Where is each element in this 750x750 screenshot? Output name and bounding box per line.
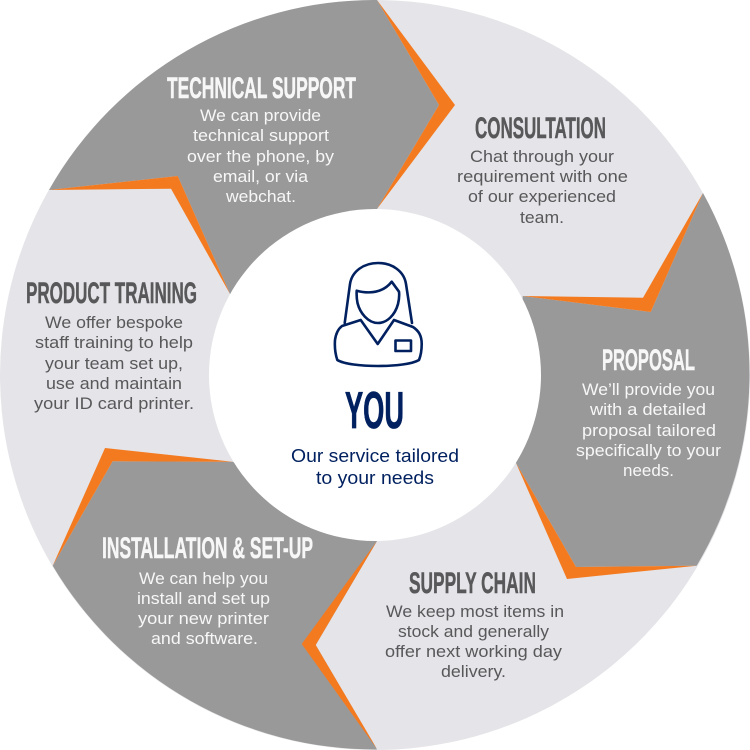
text block: installation description — [137, 569, 270, 648]
text block: installation description: and software. — [151, 629, 258, 648]
text block: consultation description: Chat through your — [470, 147, 614, 166]
panel: centre circle — [209, 209, 541, 541]
arrow: orange accent technical support to consultation — [377, 0, 455, 209]
text block: installation description: your new printer — [138, 609, 269, 628]
text block: supply chain description: We keep most items in — [386, 602, 564, 621]
text block: installation description: We can help you — [139, 569, 268, 588]
text block: technical support description: over the phone, by — [187, 147, 335, 166]
arrow: orange accent supply chain to installation — [302, 541, 377, 749]
heading: installation and set-up: INSTALLATION & SET-UP — [102, 532, 313, 565]
text block: technical support description: email, or via — [213, 167, 309, 186]
arrow: orange accent consultation to proposal — [523, 193, 703, 312]
heading: technical support: TECHNICAL SUPPORT — [167, 72, 356, 105]
text block: consultation description: of our experienced — [468, 187, 616, 206]
text block: technical support description — [187, 106, 335, 206]
arrow: orange accent installation to product training — [53, 448, 233, 566]
text block: supply chain description: offer next working day — [385, 642, 563, 661]
panel: installation segment — [53, 461, 377, 750]
text block: product training description: your ID card printer. — [34, 394, 194, 413]
text block: product training description: your team set up, — [45, 354, 183, 373]
text block: you description: Our service tailored — [291, 445, 459, 466]
text block: technical support description: We can provide — [200, 106, 321, 125]
heading: supply chain: SUPPLY CHAIN — [409, 567, 536, 600]
text block: product training description: staff training to help — [35, 333, 193, 352]
text block: installation description: install and set up — [137, 589, 270, 608]
text block: supply chain description: stock and generally — [398, 622, 550, 641]
text block: proposal description: with a detailed — [589, 400, 706, 419]
text block: technical support description: webchat. — [225, 187, 296, 206]
text block: product training description — [34, 313, 194, 413]
text block: product training description: We offer bespoke — [45, 313, 183, 332]
heading: you: YOU — [345, 382, 404, 440]
text block: consultation description — [457, 147, 628, 227]
text block: consultation description: requirement with one — [457, 167, 628, 186]
heading: consultation: CONSULTATION — [475, 112, 606, 145]
text block: product training description: use and maintain — [46, 374, 182, 393]
panel: technical support segment — [49, 0, 439, 294]
text block: proposal description: proposal tailored — [582, 421, 716, 440]
text block: you description: to your needs — [316, 467, 434, 488]
text block: proposal description: We’ll provide you — [582, 380, 715, 399]
heading: product training: PRODUCT TRAINING — [26, 277, 197, 310]
text block: proposal description — [576, 380, 721, 480]
arrow: orange accent product training to technical support — [49, 176, 230, 294]
text block: proposal description: specifically to your — [576, 441, 721, 460]
text block: proposal description: needs. — [623, 461, 674, 480]
text block: consultation description: team. — [520, 208, 564, 227]
text block: technical support description: technical support — [193, 126, 329, 145]
text block: supply chain description: delivery. — [441, 662, 506, 681]
arrow: orange accent proposal to supply chain — [516, 463, 697, 579]
icon: woman with name badge — [335, 263, 422, 366]
panel: proposal segment — [516, 193, 749, 567]
text block: you description — [291, 445, 459, 488]
text block: supply chain description — [385, 602, 564, 681]
